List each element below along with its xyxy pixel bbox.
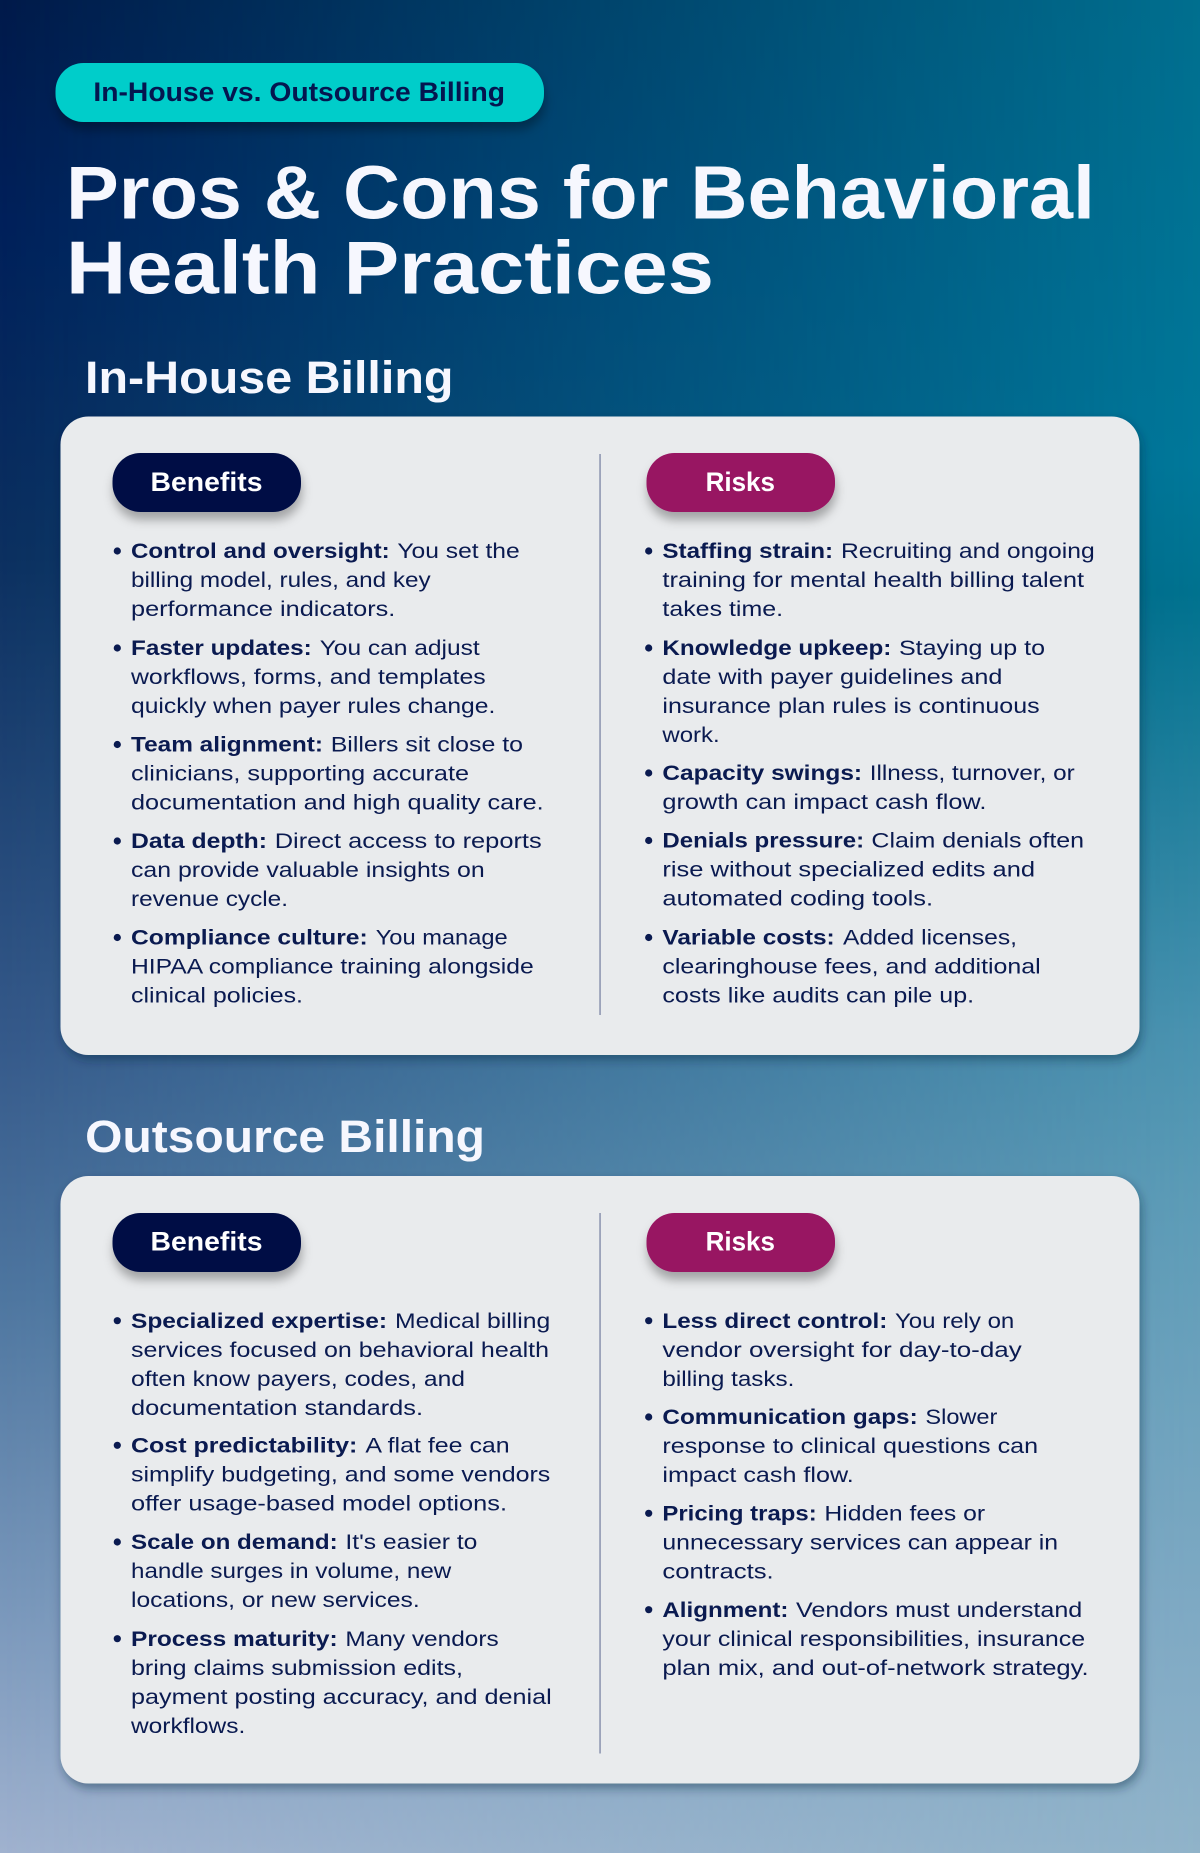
pill: Risks: Risks [706, 467, 775, 497]
item: Communication gaps: Slower [925, 1406, 997, 1429]
item: Denials pressure: rise without specialized edits and [662, 859, 1035, 882]
item: Faster updates: You can adjust [320, 637, 480, 660]
item: Less direct control [645, 1310, 1022, 1391]
item: Control and oversight: Control and oversight: [131, 540, 390, 563]
item: Variable costs [645, 927, 1041, 1008]
title [66, 151, 1095, 310]
item: Faster updates: quickly when payer rules change. [131, 695, 495, 718]
item: Less direct control: billing tasks. [662, 1368, 794, 1391]
item: Specialized expertise: services focused on behavioral health [131, 1339, 549, 1362]
item: Team alignment: documentation and high quality care. [131, 792, 544, 815]
item: Denials pressure: Denials pressure: [662, 830, 864, 853]
item: Process maturity: bring claims submission edits, [131, 1657, 463, 1680]
item: Knowledge upkeep [645, 637, 1045, 747]
item: Scale on demand: Scale on demand: [131, 1531, 338, 1554]
item: Capacity swings: growth can impact cash flow. [662, 791, 986, 814]
panel: Outsource Billing [60, 1176, 1140, 1784]
item: Pricing traps: contracts. [662, 1561, 774, 1584]
item: Staffing strain: takes time. [662, 598, 783, 621]
item: Pricing traps [645, 1502, 1058, 1584]
item: Control and oversight: billing model, rules, and key [131, 569, 431, 592]
item: Pricing traps: unnecessary services can appear in [662, 1532, 1058, 1555]
item: Staffing strain: training for mental health billing talent [662, 569, 1084, 592]
item: Knowledge upkeep: insurance plan rules is continuous [662, 695, 1040, 718]
item: Communication gaps: Communication gaps: [662, 1406, 918, 1429]
item: Less direct control: vendor oversight for day-to-day [662, 1339, 1022, 1362]
item: Capacity swings: Capacity swings: [662, 762, 862, 785]
item: Specialized expertise [114, 1310, 550, 1420]
title: Health Practices [66, 226, 714, 310]
item: Staffing strain: Staffing strain: [662, 540, 833, 563]
item: Cost predictability: A flat fee can [365, 1435, 510, 1458]
pill: Benefits [112, 453, 301, 512]
item: Specialized expertise: documentation standards. [131, 1397, 423, 1420]
item: Team alignment: clinicians, supporting accurate [131, 763, 469, 786]
item: Knowledge upkeep: Staying up to [899, 637, 1045, 660]
item: Cost predictability: Cost predictability: [131, 1435, 357, 1458]
item: Process maturity [114, 1628, 552, 1738]
pill: Risks [646, 453, 835, 512]
item: Pricing traps: Hidden fees or [824, 1503, 985, 1526]
item: Pricing traps: Pricing traps: [662, 1503, 817, 1526]
item: Alignment: your clinical responsibilities, insurance [662, 1628, 1085, 1651]
item: Communication gaps [645, 1406, 1038, 1487]
item: Faster updates: workflows, forms, and templates [130, 666, 486, 689]
item: Communication gaps: impact cash flow. [662, 1464, 854, 1487]
list: in-house risks [645, 540, 1095, 1008]
item: Alignment [645, 1599, 1089, 1680]
item: Variable costs: clearinghouse fees, and additional [662, 956, 1041, 979]
item: Control and oversight: You set the [397, 540, 520, 563]
item: Scale on demand: locations, or new services. [131, 1589, 420, 1612]
item: Staffing strain [645, 540, 1095, 621]
panel: In-House Billing [60, 416, 1140, 1055]
item: Specialized expertise: often know payers, codes, and [131, 1368, 465, 1391]
item: Denials pressure: automated coding tools. [662, 888, 933, 911]
item: Denials pressure [645, 830, 1084, 911]
item: Data depth: Direct access to reports [275, 830, 542, 853]
item: Knowledge upkeep: date with payer guidelines and [662, 666, 1002, 689]
item: Cost predictability: offer usage-based model options. [131, 1493, 507, 1516]
tag pill: In-House vs. Outsource Billing [56, 63, 544, 122]
item: Process maturity: workflows. [130, 1715, 245, 1738]
list: outsource risks [645, 1310, 1089, 1680]
item: Alignment: plan mix, and out-of-network strategy. [662, 1657, 1089, 1680]
item: Control and oversight [114, 540, 520, 621]
item: Cost predictability [114, 1434, 550, 1516]
item: Less direct control: Less direct control: [662, 1310, 887, 1333]
item: Variable costs: costs like audits can pile up. [662, 985, 974, 1008]
item: Faster updates: Faster updates: [131, 637, 312, 660]
heading: Outsource Billing: Outsource Billing [85, 1111, 485, 1162]
item: Compliance culture: You manage [376, 927, 508, 950]
list: in-house benefits [114, 540, 544, 1008]
item: Team alignment: Billers sit close to [331, 734, 523, 757]
item: Cost predictability: simplify budgeting, and some vendors [131, 1464, 550, 1487]
pill: Benefits: Benefits [150, 1227, 262, 1257]
item: Capacity swings [645, 762, 1075, 814]
item: Compliance culture: clinical policies. [131, 985, 303, 1008]
item: Compliance culture [114, 927, 534, 1008]
item: Scale on demand [114, 1531, 477, 1612]
item: Scale on demand: handle surges in volume, new [131, 1560, 452, 1583]
item: Process maturity: Many vendors [345, 1628, 499, 1651]
item: Team alignment: Team alignment: [131, 734, 323, 757]
item: Faster updates [114, 637, 495, 718]
item: Less direct control: You rely on [895, 1310, 1014, 1333]
item: Process maturity: payment posting accuracy, and denial [131, 1686, 552, 1709]
item: Data depth [114, 830, 542, 911]
item: Knowledge upkeep: work. [661, 724, 720, 747]
item: Specialized expertise: Specialized expertise: [131, 1310, 387, 1333]
item: Process maturity: Process maturity: [131, 1628, 338, 1651]
item: Team alignment [114, 734, 544, 815]
pill: Risks: Risks [706, 1227, 775, 1257]
title: Pros & Cons for Behavioral [66, 151, 1095, 235]
tag pill: In-House vs. Outsource Billing: In-House vs. Outsource Billing [93, 77, 505, 107]
item: Control and oversight: performance indicators. [131, 598, 395, 621]
pill: Benefits [112, 1213, 301, 1272]
item: Knowledge upkeep: Knowledge upkeep: [662, 637, 891, 660]
item: Compliance culture: Compliance culture: [131, 927, 368, 950]
item: Staffing strain: Recruiting and ongoing [841, 540, 1095, 563]
list: outsource benefits [114, 1310, 552, 1738]
item: Data depth: revenue cycle. [131, 888, 288, 911]
item: Variable costs: Variable costs: [662, 927, 835, 950]
heading: In-House Billing: In-House Billing [85, 352, 453, 403]
item: Communication gaps: response to clinical questions can [662, 1435, 1038, 1458]
item: Specialized expertise: Medical billing [395, 1310, 550, 1333]
item: Scale on demand: It's easier to [345, 1531, 477, 1554]
item: Denials pressure: Claim denials often [871, 830, 1084, 853]
pill: Risks [646, 1213, 835, 1272]
item: Alignment: Vendors must understand [796, 1599, 1082, 1622]
item: Variable costs: Added licenses, [843, 927, 1017, 950]
pill: Benefits: Benefits [150, 467, 262, 497]
item: Alignment: Alignment: [662, 1599, 788, 1622]
item: Capacity swings: Illness, turnover, or [870, 762, 1075, 785]
item: Data depth: can provide valuable insights on [131, 859, 485, 882]
item: Data depth: Data depth: [131, 830, 267, 853]
item: Compliance culture: HIPAA compliance training alongside [131, 956, 534, 979]
